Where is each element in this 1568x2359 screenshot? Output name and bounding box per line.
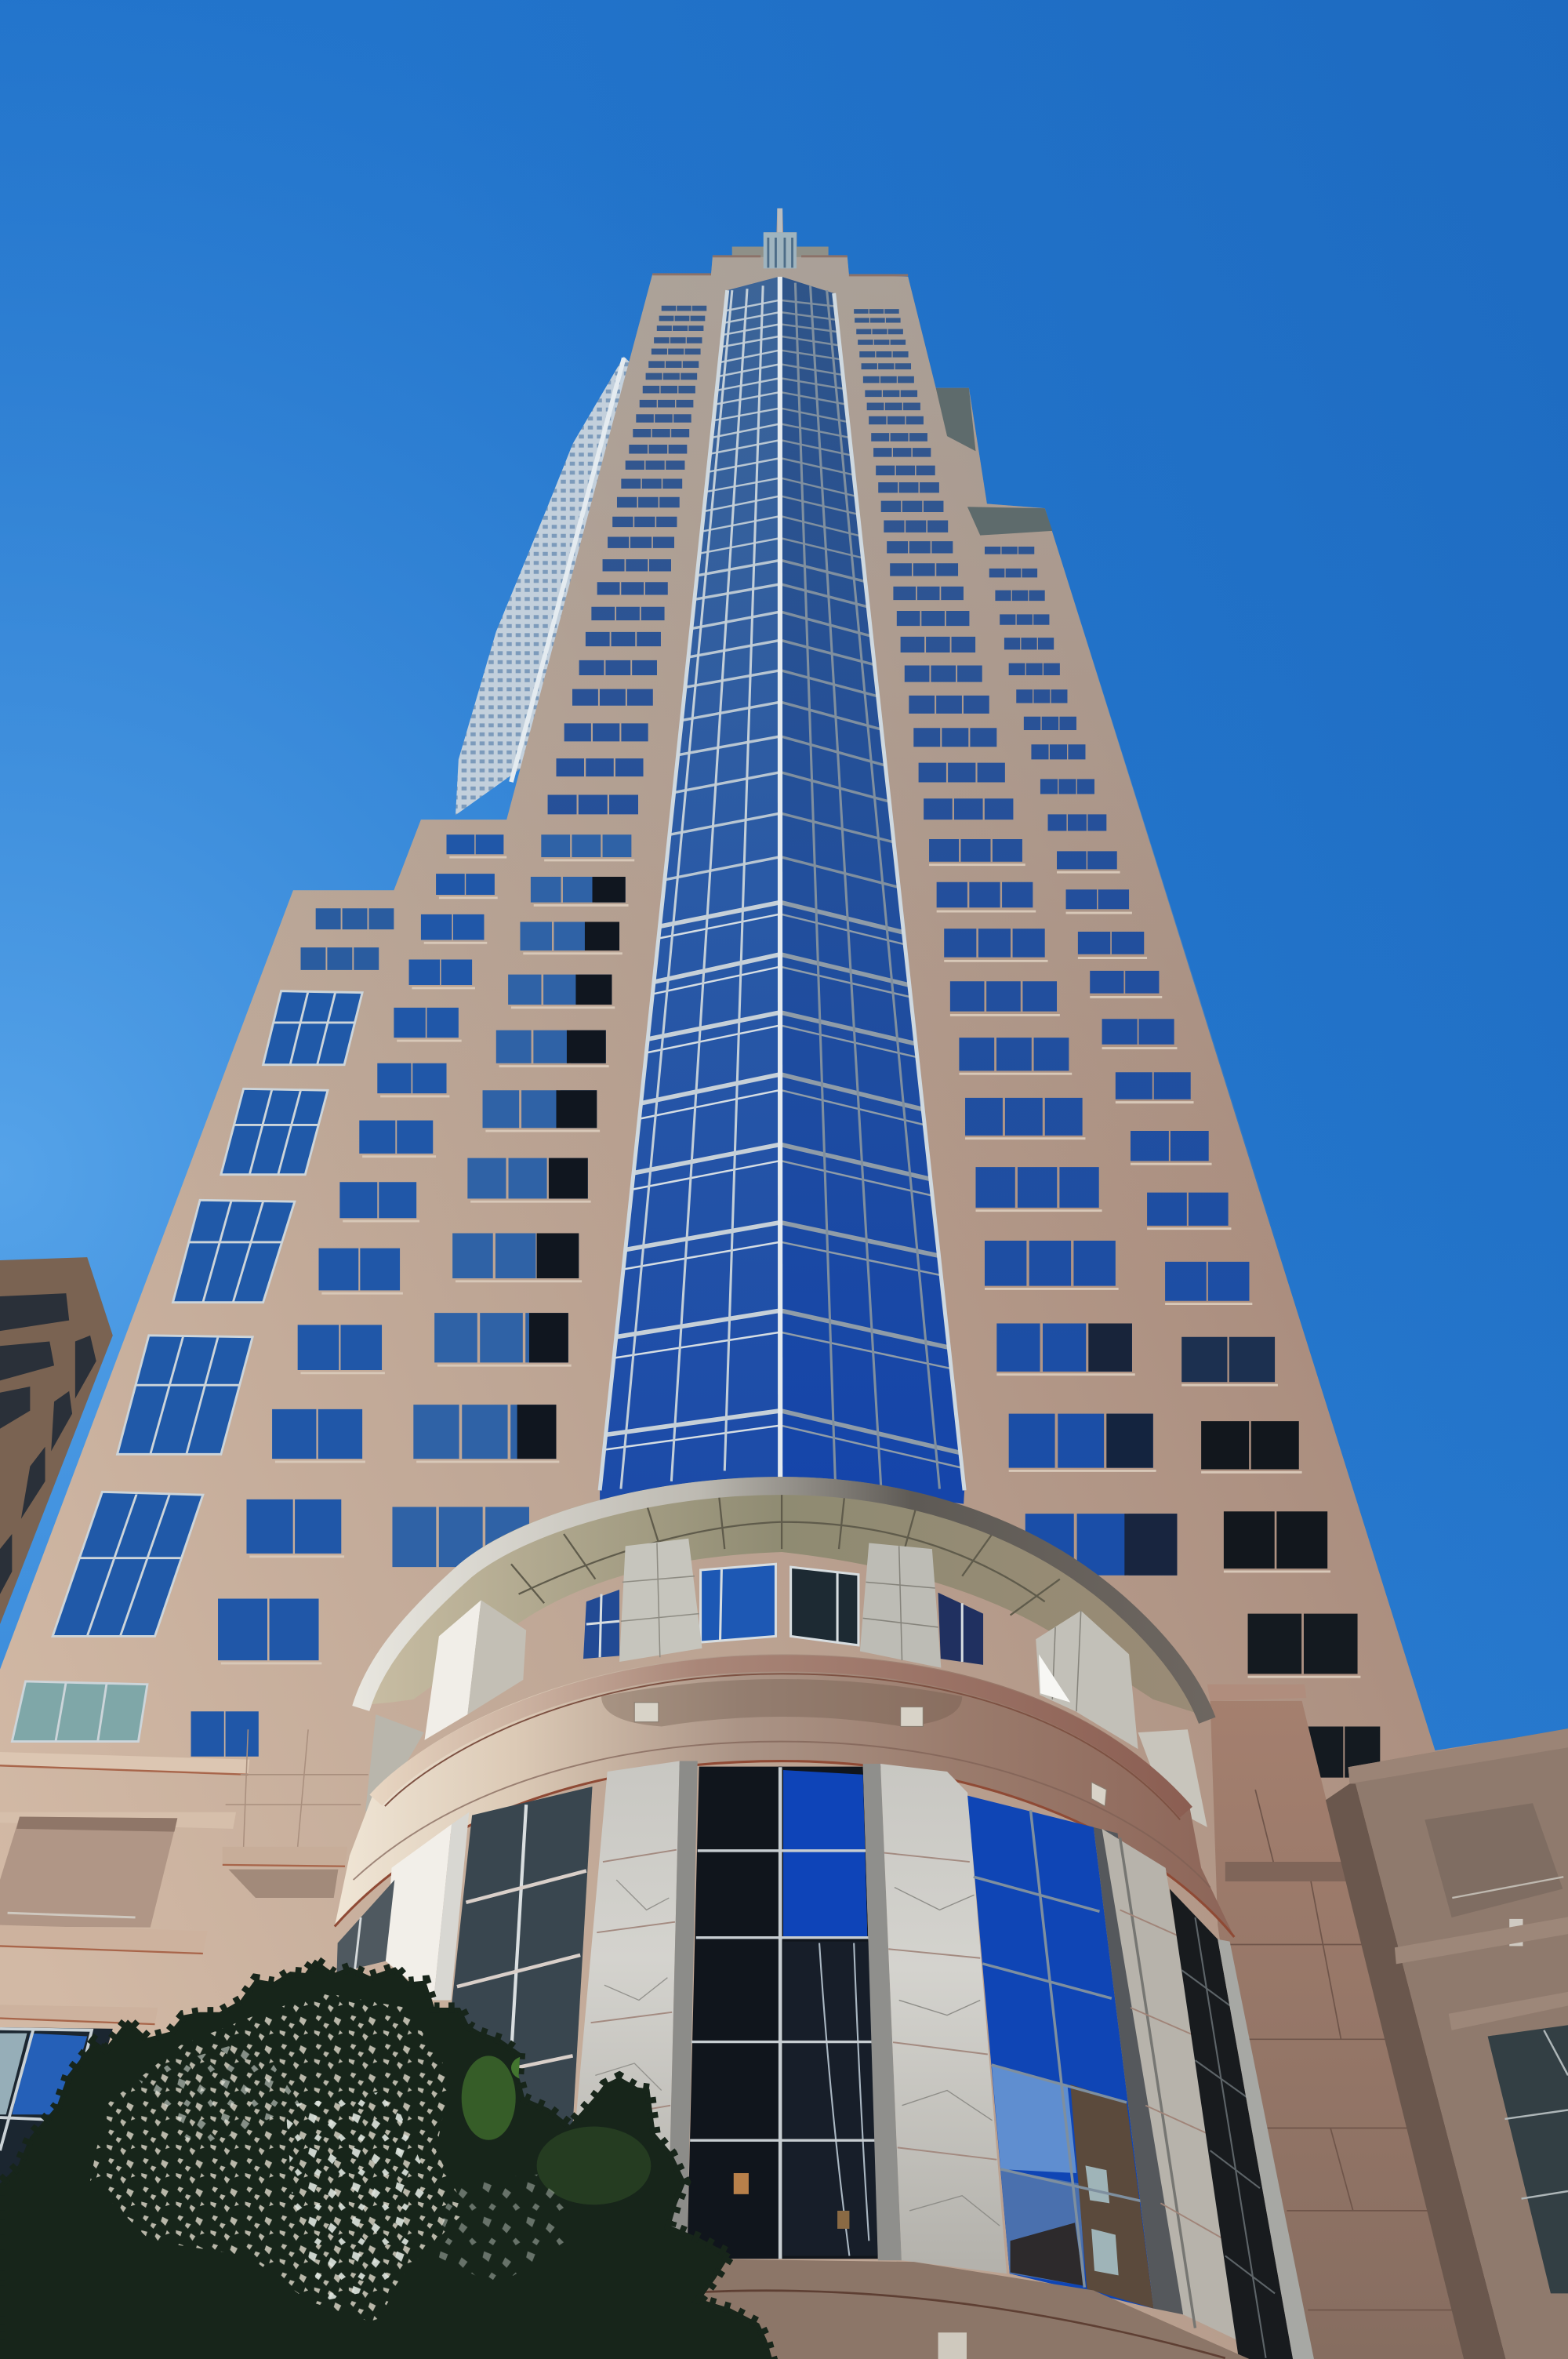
foliage green highlights: [462, 2055, 516, 2140]
canopy soffit: [358, 1477, 1210, 1717]
right low-rise building: [1348, 1728, 1568, 2359]
tower reflection: [783, 1942, 878, 2255]
rotunda window three, blue reflective: [967, 1796, 1154, 2309]
drum entablature band: [335, 1654, 1234, 1937]
right podium pier: [1207, 1685, 1466, 2359]
tree silhouette: [0, 1960, 782, 2359]
left facade window column near glass, lower: [392, 846, 631, 1537]
warm interior lights: [734, 2173, 749, 2194]
upper ledge: [1395, 1917, 1568, 1964]
rotunda base band: [601, 2259, 1249, 2359]
canopy shadow on band: [601, 1679, 962, 1726]
pillar one: [425, 1600, 526, 1740]
mullions: [779, 1767, 781, 2259]
right glass face: [782, 277, 964, 1504]
canopy metal edge: [361, 1486, 1207, 1721]
building reflection: [1070, 2085, 1154, 2309]
left wing large windows: [12, 919, 394, 1742]
foreground tree: [0, 1960, 782, 2359]
rotunda window two, tall centre: [687, 1767, 878, 2259]
bottom-left ground floor window: [0, 2027, 113, 2241]
vertical mullions: [600, 277, 964, 1490]
rotunda marble pier one: [568, 1761, 698, 2255]
window sills: [221, 857, 1360, 1677]
right facade window column near glass: [854, 311, 1177, 1544]
sky reflection: [783, 1770, 867, 1937]
pillar four: [1036, 1611, 1138, 1749]
left facade middle window column: [191, 845, 503, 1734]
rotunda marble pier three: [1094, 1827, 1243, 2343]
mullions: [974, 1810, 1142, 2288]
windows behind canopy: [583, 1564, 983, 1665]
left bright marble strip and small window: [337, 1812, 469, 2000]
pillar three: [860, 1543, 941, 1668]
rotunda marble pier two: [863, 1764, 1007, 2274]
recessed panel: [1425, 1803, 1563, 1917]
left facade window column near glass, upper: [548, 308, 706, 805]
grey cast on the upper tower stone: [141, 256, 1293, 1293]
right floor bands: [782, 300, 962, 1468]
cloud reflection: [992, 2065, 1076, 2173]
pillar two: [619, 1539, 702, 1662]
left glass face: [600, 277, 780, 1504]
rotunda window one, grey glass: [436, 1787, 593, 2150]
lower rim shading: [354, 1742, 1210, 1888]
left podium with ledges and recess: [0, 1729, 368, 2024]
right wing window column: [985, 551, 1380, 1752]
left floor bands: [604, 300, 779, 1450]
side marble behind drum: [365, 1714, 1207, 1827]
recessed shadow strip: [1326, 1783, 1506, 2359]
rotunda window four, dark: [1170, 1889, 1314, 2359]
lower ledge: [1449, 1992, 1568, 2030]
neighbouring building at left: [0, 1257, 113, 1624]
upper rim: [376, 1663, 1186, 1812]
sky gaps through foliage: [90, 1993, 466, 2324]
ground floor window: [1488, 2025, 1568, 2293]
rear right shaft roof: [936, 388, 1052, 536]
curved glass rear tower: [456, 356, 630, 815]
marble pillars under canopy: [425, 1539, 1138, 1749]
central glass curtain wall: [600, 277, 964, 1504]
tower crown and mast: [652, 209, 908, 275]
inset plaques: [634, 1703, 1106, 1806]
